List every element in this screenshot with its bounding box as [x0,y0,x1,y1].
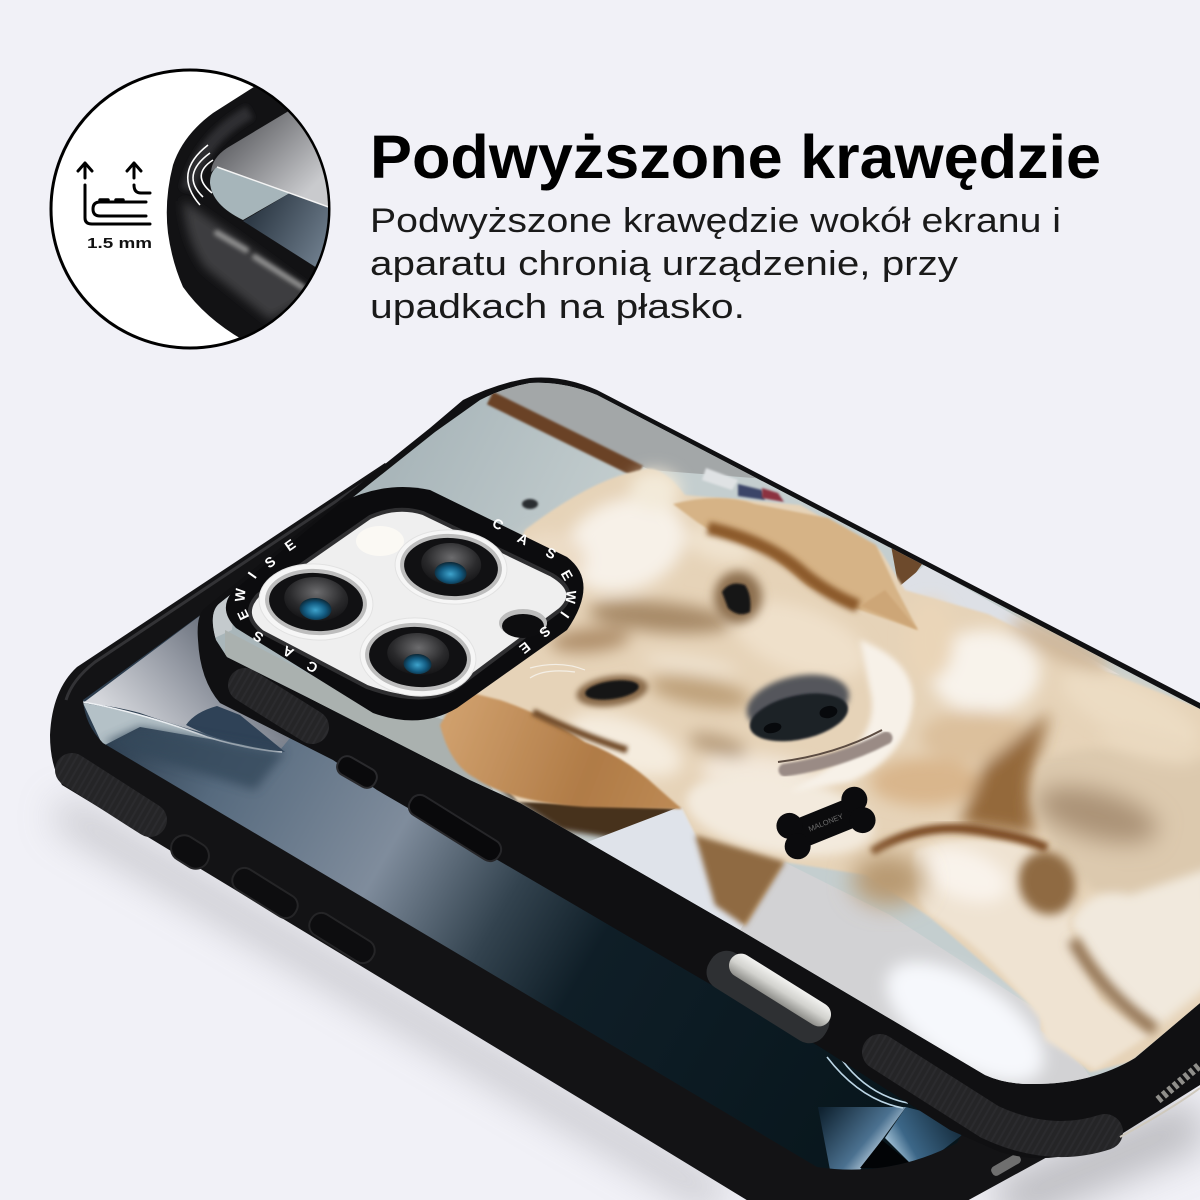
CASEWISE lettering on ring: E [234,607,252,623]
dark fold above foreleg [872,828,1047,852]
CASEWISE lettering on ring: W [231,587,249,602]
long side button [405,791,505,865]
soft shadow under phones [60,810,1200,1200]
lens 2 [393,526,509,608]
wood behind ear [892,548,922,586]
CASEWISE lettering on ring: W [562,590,580,605]
frame upper highlight [66,472,380,700]
leg crease [1073,940,1155,1030]
CASEWISE lettering on ring: S [543,544,559,562]
description text [370,202,1061,326]
glass lower pale [210,167,290,220]
charging port of lower phone [990,1153,1022,1177]
body fur tones [870,600,1200,835]
dark blue wedge [103,727,285,790]
tag text: MALONEY [807,811,845,834]
whiskers [530,664,585,678]
heading: Podwyższone krawędzie [370,123,1101,191]
CASEWISE lettering on ring: A [280,643,296,661]
CASEWISE lettering on ring: S [536,623,554,641]
lens 1 [256,560,376,644]
CASEWISE lettering on ring: I [244,569,260,581]
glass lower dark [243,193,340,290]
foreleg patch [1010,843,1084,923]
camera plate [250,510,568,698]
small dark object [522,499,538,509]
right leg lower fur [1070,868,1200,1025]
white shelf [702,468,738,490]
bottom edge highlight [1120,1088,1200,1137]
upper phone in black case [198,370,1200,1158]
description text: upadkach na płasko. [370,288,745,326]
dark shadow under ear [500,790,680,842]
reflection line [217,167,330,208]
CASEWISE lettering on ring: A [515,530,531,548]
CASEWISE lettering on ring: E [282,536,298,554]
ear tip [860,590,918,630]
thickness label: 1.5 mm [87,235,152,252]
lower left grey strip [225,630,500,800]
light curve on glass [83,702,282,752]
grey band above the beam [490,382,757,478]
camera plateau ring [226,487,584,720]
close-up of case corner [167,70,340,340]
nose [741,666,856,749]
camera flash [356,526,404,556]
corner bumpers [245,685,312,727]
mute switch cut-out [334,753,380,791]
foreleg [912,840,1150,1070]
microphone hole [499,609,547,638]
upper ear [673,498,918,630]
lighter bumper zone [183,200,315,320]
CASEWISE lettering on ring: E [516,639,534,657]
CASEWISE lettering on ring [231,515,580,676]
icon: raised lip diagram with arrows [78,163,150,224]
left eye [574,671,650,711]
back phone frame [50,463,1060,1200]
chest fur [684,779,877,860]
blanket right [740,862,1100,1090]
CASEWISE lettering on ring: S [250,628,266,646]
brown chest leg [695,835,785,926]
head fur tones [532,462,862,782]
front phone frame [198,378,1200,1158]
silver side button [700,944,836,1050]
muzzle crescent [802,640,916,788]
right leg streaks [1031,776,1163,854]
white blanket at the back [895,565,1120,675]
wall [200,370,1200,1100]
mouth [785,738,886,770]
dark triangle [860,1140,908,1168]
dog body [450,468,1200,1072]
volume and action buttons [166,830,379,967]
CASEWISE lettering on ring: E [558,567,576,583]
white arcs [188,145,213,205]
ear fold shadow [708,528,858,606]
lens 3 [357,614,479,700]
right leg [1028,752,1200,890]
colourful items [738,484,765,500]
glass upper [211,80,340,211]
lower phone in black case [50,463,1060,1200]
CASEWISE lettering on ring: I [557,609,573,621]
wooden beam [490,398,640,472]
callout circle: raised edge detail [51,70,340,348]
CASEWISE lettering on ring: C [490,515,506,533]
curved light lines [827,1057,908,1108]
right eye [714,571,762,623]
dark wave on glass [186,706,285,752]
pale glass below curve [83,703,285,752]
back phone screen [83,616,962,1170]
description text: Podwyższone krawędzie wokół ekranu i [370,202,1061,240]
bone shaped name tag [773,783,879,863]
photo of puppy on the case [200,370,1200,1106]
upper grey glass wedge [83,616,290,748]
silver reflection at corner [212,594,232,638]
white blanket left [585,806,745,935]
frame corner bumper [72,770,150,820]
description text: aparatu chronią urządzenie, przy [370,245,958,283]
speaker grille [1158,1065,1200,1100]
bumper highlights [217,233,302,287]
CASEWISE lettering on ring: C [304,658,320,676]
lower ear [440,690,682,809]
screen reflection bands at bottom corner [818,1107,906,1170]
CASEWISE lettering on ring: S [262,553,278,571]
lower body shadow [852,854,924,906]
ear crease [533,712,627,750]
